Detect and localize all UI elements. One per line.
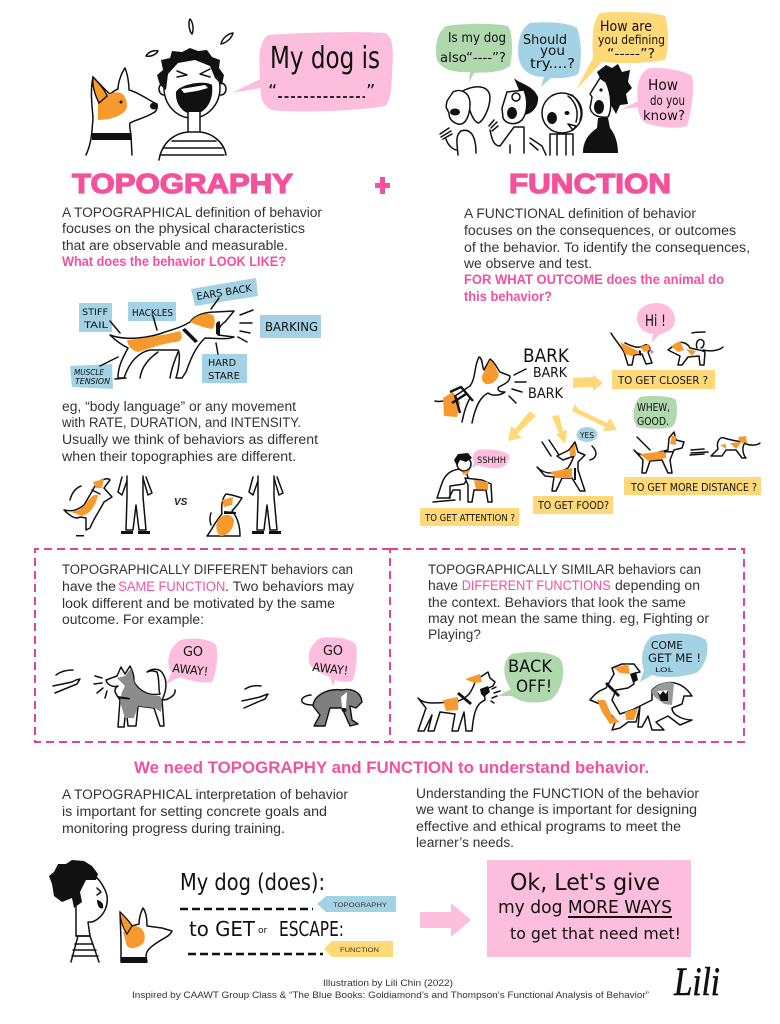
label: to get attention [420,508,519,526]
label: hard stare: HARD [208,358,236,369]
tag: topography [317,896,396,912]
speech bubble: blue: you [540,44,565,59]
text block: understanding function: effective and ethical programs to meet the [416,819,681,835]
heading: summary statement: We need TOPOGRAPHY and FUNCTION to understand behavior. [134,758,649,777]
label: to get closer: TO GET CLOSER ? [617,375,708,387]
text block: different functions: have [428,578,458,594]
label: muscle tension [70,364,113,389]
person: woman looking up [530,93,582,155]
panel: topographically different, same function [35,549,390,742]
heading: FUNCTION: FUNCTION [509,168,671,199]
text block: body language: with RATE, DURATION, and INTENSITY. [61,415,301,431]
credits: Inspired by CAAWT Group Class & “The Blue Books: Goldiamond’s and Thompson’s Functional Analysis of Behavior” [132,990,649,1001]
text block: topography definition: focuses on the physical characteristics [62,221,305,237]
icon: dog running away [690,436,760,458]
text block: topography definition [62,205,322,270]
speech bubble: Hi! [637,303,675,342]
label: hard stare [202,354,247,383]
speech bubble: sshhh: SSHHH [477,456,506,466]
speech bubble: go away 1: GO [183,645,203,660]
panel: more ways: to get that need met! [510,924,681,943]
speech bubble: My dog is: My dog is [270,41,380,76]
speech bubble: My dog is: ” [366,81,375,102]
illustration: jumping dog vs sitting dog [64,476,283,536]
speech bubble: go away 2: GO [323,644,343,659]
panel: more ways: Ok, Let's give [510,870,660,896]
text block: function definition: FOR WHAT OUTCOME does the animal do [464,272,724,288]
label: barking [260,315,321,338]
speech bubble: go away 2: AWAY! [312,660,349,678]
label leader lines [100,298,253,379]
icon: dog with distance [634,432,684,473]
text block: body language: Usually we think of behaviors as different [62,432,318,448]
text: BARK BARK BARK [523,345,569,402]
speech bubble: yellow: How are [600,19,652,35]
icon: jumping dog [64,479,112,536]
text: to get or escape [189,917,344,941]
icon: dog looking at food [537,440,596,491]
icon: white dog barking [418,672,500,731]
speech bubble: pink [622,68,693,128]
speech bubble: yes: YES [579,431,594,440]
text: to get or escape: to GET [189,917,256,941]
label: muscle tension: TENSION [75,377,110,386]
icon: reaching hand [53,670,80,693]
dashed frame [35,549,390,742]
icon: standing person legs 2 [249,476,283,534]
text block: body language: when their topographies are different. [61,449,296,465]
text block: topographical interpretation: monitoring progress during training. [62,821,285,837]
icon: dog greeting [611,333,654,365]
icon: smiling woman [49,860,107,962]
speech bubble: Whew, good: WHEW, [637,401,670,414]
speech bubble: go away 1: AWAY! [172,661,209,679]
text: to get or escape: ESCAPE: [279,917,344,941]
label: to get food: TO GET FOOD? [537,500,609,512]
speech bubble: green: Is my dog [448,31,506,46]
speech bubble: go away 2 [309,637,357,686]
heading: TOPOGRAPHY: TOPOGRAPHY [72,168,293,199]
icon: barking dog [110,311,234,378]
person: woman with ponytail [440,87,490,155]
text block: different functions: DIFFERENT FUNCTIONS [462,578,611,594]
text: to get or escape: or [258,926,268,936]
speech bubble: Whew, good: GOOD. [637,415,669,428]
speech bubble: blue: Should [523,33,567,48]
icon: sitting dog [207,494,242,536]
text block: different functions: the context. Behaviors that look the same [428,595,686,611]
icon: plus sign [375,177,390,194]
text block: same function [62,562,355,628]
arrow: to closer [573,375,603,391]
blank line: topography [180,908,313,910]
speech bubble: yellow: you defining [598,33,665,47]
label: muscle tension: MUSCLE [74,368,104,377]
speech bubble: come get me: COME [651,639,683,652]
text block: topography definition: A TOPOGRAPHICAL definition of behavior [62,205,322,221]
text block: same function: have the [62,579,116,595]
text block: same function: look different and be motivated by the same [62,596,335,612]
label: hard stare: STARE [208,371,240,382]
tag: topography: TOPOGRAPHY [333,902,388,909]
text block: function definition: focuses on the consequences, or outcomes [464,223,736,239]
text block: understanding function: we want to change is important for designing [415,802,697,818]
icon: grey dog cowering [302,690,362,726]
speech bubble: blue: try....? [530,57,575,72]
text block: topographical interpretation [62,787,348,837]
icon: dog approaching on leash [668,332,723,365]
text block: same function: SAME FUNCTION [118,579,225,595]
text block: same function: TOPOGRAPHICALLY DIFFERENT behaviors can [62,562,353,578]
text block: function definition: A FUNCTIONAL definition of behavior [464,206,696,222]
speech bubble: pink: do you [650,94,685,109]
speech bubble: Hi!: Hi ! [645,311,666,330]
text block: understanding function: Understanding the FUNCTION of the behavior [416,786,699,802]
label: stiff tail: TAIL [83,321,108,331]
text block: understanding function: learner’s needs. [416,835,514,851]
text: BARK BARK BARK: BARK [523,345,569,367]
speech bubble: come get me: LOL [655,666,674,674]
icon: crying owner [146,19,233,160]
tag: function [324,941,393,957]
text block: different functions: depending on [615,578,700,594]
dashed frame [390,549,744,742]
person: man with glasses [489,78,538,153]
speech bubble: sshhh [472,449,509,468]
text block: different functions: Playing? [428,627,481,643]
speech bubble: come get me [640,633,707,682]
speech bubble: back off: BACK [508,657,553,677]
speech bubble: yes [576,427,598,442]
label: ears back: EARS BACK [196,283,253,303]
illustration: dog and distressed owner [86,19,233,160]
text block: body language [61,399,318,465]
text block: same function: . Two behaviors may [225,579,355,595]
text block: topography definition: that are observable and measurable. [62,238,288,254]
icon: reaching hand 2 [242,686,268,708]
panel: more ways [487,860,691,957]
text block: same function: outcome. For example: [62,612,204,628]
speech bubble: pink: know? [643,109,685,124]
diagram: possible functions of barking [420,303,761,526]
label: to get attention: TO GET ATTENTION ? [424,513,515,524]
speech bubble: go away 1 [166,639,217,684]
text block: topographical interpretation: is important for setting concrete goals and [62,804,327,820]
text block: body language: eg, “body language” or any movement [62,399,296,415]
panel: more ways: my dog MORE WAYS [498,897,672,918]
text block: different functions: may not mean the same thing. eg, Fighting or [428,611,709,627]
text block: topographical interpretation: A TOPOGRAPHICAL interpretation of behavior [62,787,348,803]
text: BARK BARK BARK: BARK [533,366,567,381]
label: to get more distance: TO GET MORE DISTANCE ? [630,482,757,494]
icon: grey dog barking [94,666,175,727]
label: barking: BARKING [265,320,318,334]
speech bubble: green: also“----”? [440,51,506,66]
blank line: function [188,953,323,955]
credits [132,978,649,1001]
credits: Illustration by Lili Chin (2022) [323,978,453,989]
person: man with spiky hair [583,64,632,153]
speech bubble: My dog is: “ [268,81,277,102]
arrow: to food [552,415,567,444]
tag: function: FUNCTION [340,947,379,954]
text block: understanding function [415,786,699,851]
label: ears back [191,278,258,306]
speech bubble: blue [518,22,581,87]
speech bubble: yellow [576,12,668,90]
label: stiff tail [79,303,112,332]
speech bubble: My dog is [232,32,393,111]
text block: function definition [463,206,750,305]
label: to get more distance [624,477,761,495]
icon: two dogs playing [590,664,692,730]
label: to get food [533,496,613,514]
icon: dog head [120,908,172,963]
text block: different functions [428,562,709,643]
label: stiff tail: STIFF [82,308,108,318]
panel: topographically similar, different functions [390,549,744,742]
speech bubble: back off: OFF! [516,677,552,697]
label: vs: VS [174,497,188,508]
speech bubble: Whew, good [634,396,677,429]
arrow: to attention [508,411,536,441]
text: BARK BARK BARK: BARK [528,386,564,402]
text block: function definition: this behavior? [464,289,552,305]
text: my dog does: My dog (does): [180,870,325,896]
text block: function definition: we observe and test. [463,256,592,272]
signature: Lili: Lili [673,959,720,1004]
label: hackles [128,302,176,321]
speech bubble: green [436,24,512,83]
icon: person kneeling with dog [433,453,492,502]
label: to get closer [612,370,715,389]
label: hackles: HACKLES [132,308,173,319]
speech bubble: back off [498,652,563,703]
arrow: to distance [572,404,617,431]
icon: standing person legs 1 [118,476,152,534]
icon: barking dog in harness [435,357,526,423]
icon: dog looking at owner [86,68,158,155]
illustration: people asking questions [436,12,693,155]
text block: topography definition: What does the behavior LOOK LIKE? [62,254,286,270]
speech bubble: come get me: GET ME ! [648,651,701,665]
speech bubble: yellow: “-----”? [607,47,655,62]
text block: different functions: TOPOGRAPHICALLY SIMILAR behaviors can [428,562,701,578]
arrow: pink [420,903,471,937]
text block: function definition: of the behavior. To identify the consequences, [464,240,750,256]
diagram: barking dog with labelled body language [70,278,321,389]
speech bubble: pink: How [648,76,678,94]
